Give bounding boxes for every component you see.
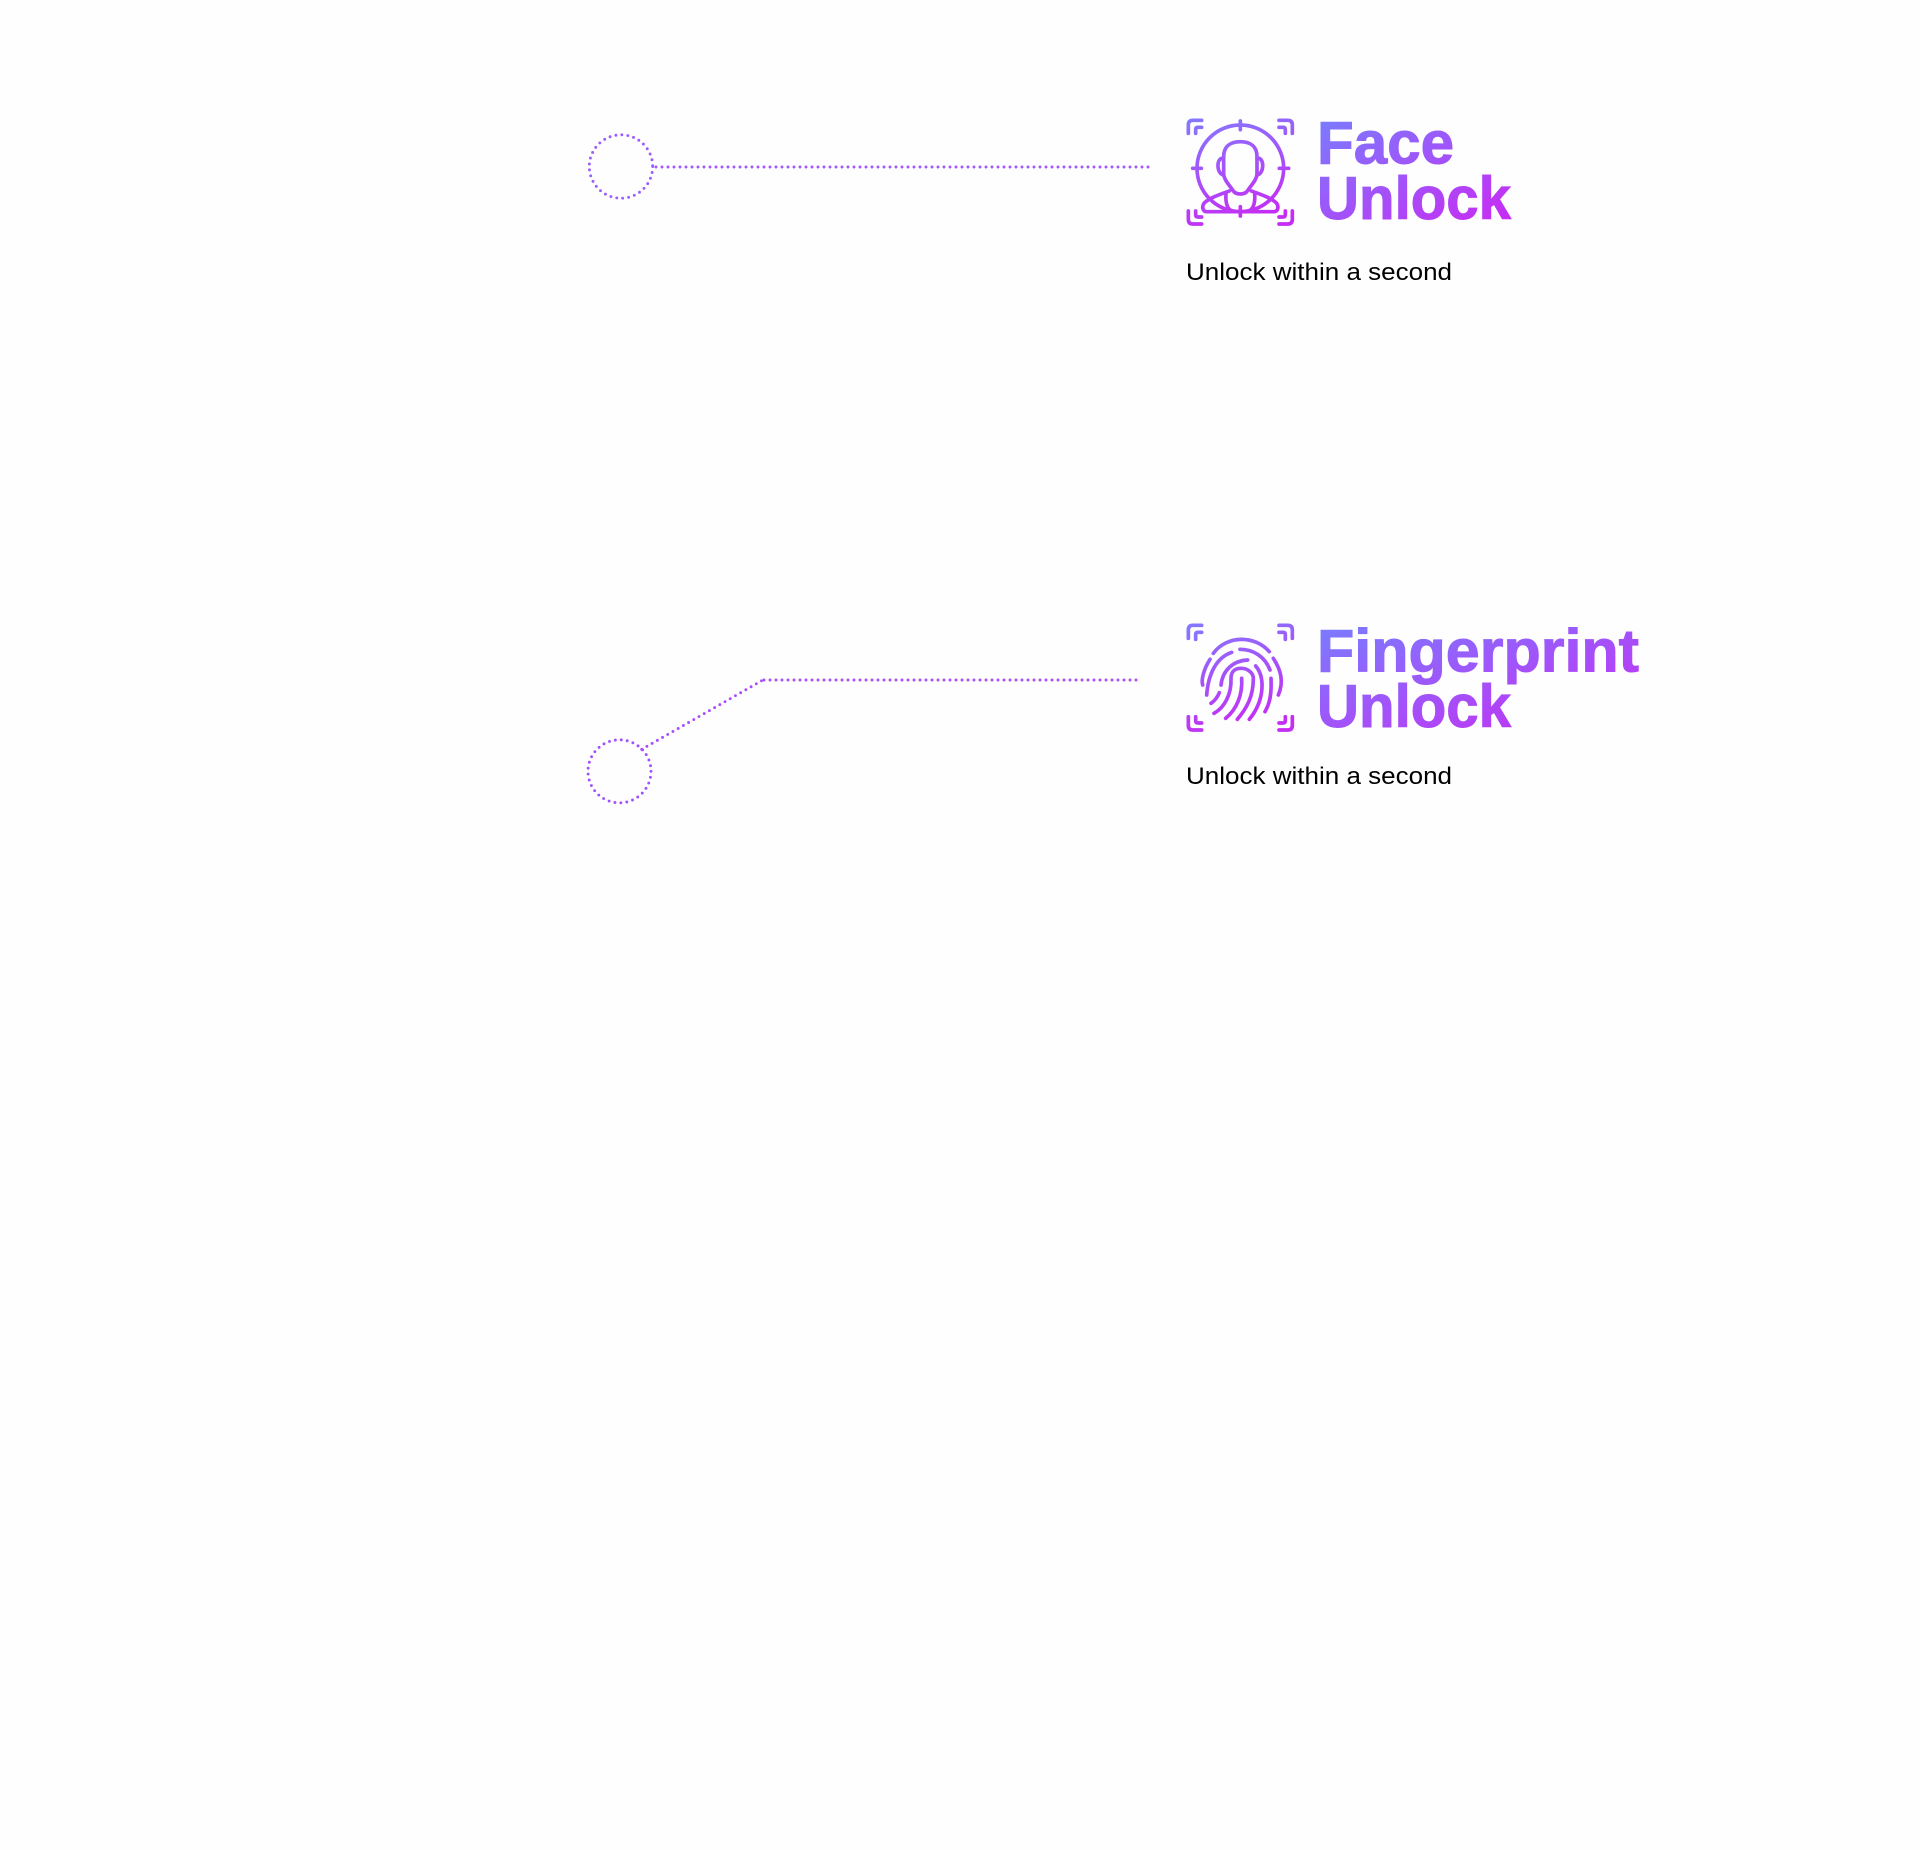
- dotted leader line: face: [656, 166, 1148, 168]
- connector: fingerprint unlock: [588, 680, 1136, 803]
- icon: fingerprint scan: [1188, 625, 1292, 730]
- heading: fingerprint unlock: [1317, 618, 1639, 740]
- heading: face unlock: [1317, 110, 1512, 232]
- panel: fingerprint unlock: [1186, 618, 1639, 790]
- heading: fingerprint unlock: Unlock: [1317, 673, 1512, 740]
- connector: face unlock: [589, 135, 1148, 198]
- icon: face scan: [1188, 120, 1292, 224]
- heading: face unlock: Face: [1317, 110, 1454, 176]
- dotted circle marker: fingerprint: [588, 740, 651, 803]
- dotted leader line: fingerprint: [642, 680, 1136, 749]
- panel: face unlock: [1186, 110, 1512, 286]
- heading: face unlock: Unlock: [1317, 165, 1512, 232]
- heading: fingerprint unlock: Fingerprint: [1317, 618, 1639, 684]
- dotted circle marker: face: [589, 135, 653, 198]
- caption: face unlock: Unlock within a second: [1186, 259, 1452, 286]
- caption: fingerprint unlock: Unlock within a second: [1186, 763, 1452, 790]
